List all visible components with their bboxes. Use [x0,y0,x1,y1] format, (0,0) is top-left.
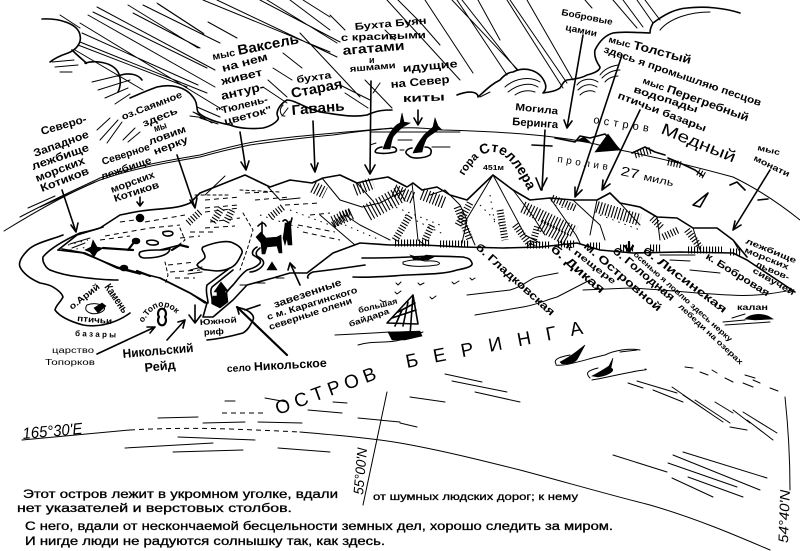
labels: south-coast bays and capes [473,240,772,367]
label: Staraya Gavan bay: Гавань [291,97,345,118]
bottom text block: С него, вдали от нескончаемой бесцельности земных дел, хорошо следить за миром. [25,521,613,533]
label: sea lion rookery: лежбище [744,237,798,265]
label: Cape Tolsty: мыс Толстый [607,31,693,67]
labels: south-coast bays and capes: к. Бобровая [703,250,772,299]
island outline and mountains [58,175,795,317]
bottom text block: Этот остров лежит в укромном уголке, вдали [23,489,338,501]
label: kingdom of puffins: Топорков [45,357,96,367]
label: strait 27 miles: 27 миль [619,163,675,189]
label: Cape Peregrebny: водопады [632,84,699,116]
label: Nikolsky roadstead: Никольский [122,341,194,361]
label: big baidara: байдара [348,306,391,329]
label: whales going north: киты [403,92,445,105]
label: Medny island [593,114,738,166]
label: Nikolsky roadstead [122,341,194,375]
label: Mount Steller: 451м [483,165,504,172]
label: sea lion rookery: морских [743,246,791,272]
kalan (sea otter) [723,314,773,325]
west bays and islets [19,227,260,340]
clouds [42,7,740,143]
grid lines and coordinates: 165°30'E [22,421,83,443]
label: lake Saranное and northern rookery: мы [153,120,168,135]
labels: south-coast bays and capes: б. Гладковская [473,241,557,318]
label: whales going north: на Север [390,74,450,91]
label: sea lion rookery: сивучей [751,266,796,297]
label: reindeer brought from Karaginsky: завезенные [272,277,344,311]
label: beaver traps: Бобровые [561,7,614,27]
speech-shaped cloud [130,86,392,129]
label: Cape Vaksel: цветок" [223,105,273,128]
label: Buyan bay: яшмами [349,60,396,74]
label: Buyan bay: с красивыми [341,30,426,44]
bottom text block [17,489,613,548]
label: Cape Peregrebny: мыс Перегребный [641,75,750,124]
bottom text block: И нигде люди не радуются солнышку так, как здесь. [25,536,385,548]
label: Cape Monati [752,143,792,179]
grid lines and coordinates: 55°00'N [350,446,370,495]
boat: big baidara [387,295,422,340]
label: kingdom of puffins: царство [52,346,95,355]
reindeer [256,218,292,254]
whales at sea [555,345,646,380]
sea heading: Bering Island: ОСТРОВ [273,364,379,420]
label: Bering's grave: Могила [515,102,559,118]
label: Bering's grave: Беринга [512,116,559,131]
grid lines and coordinates: 54°40'N [775,489,793,543]
labels: south-coast bays and capes: к пещере [564,241,618,286]
label: Buyan bay [341,16,427,74]
label: Ariy Kamen islet [67,282,130,339]
label: Ariy Kamen islet: птичьи [77,313,113,326]
label: sea lion rookery: львов- [754,260,791,282]
label: reindeer brought from Karaginsky: с м. Карагинского [266,285,359,322]
label: reindeer brought from Karaginsky: северные олени [268,296,353,332]
waves and birds [125,255,793,497]
label: Staraya Gavan bay: Старая [290,75,344,101]
label: kingdom of puffins [45,346,96,367]
label: Ariy Kamen islet: базары [75,329,117,339]
label: strait 27 miles: пролив [557,154,609,173]
label: lake Saranное and northern rookery: лежбище [99,154,154,183]
island interior: lakes, rivers, landmarks [62,190,284,308]
label: Cape Monati: мыс [757,143,782,157]
label: Cape Peregrebny [616,75,750,134]
Medny island mountains [555,134,768,207]
label: Ariy Kamen islet: о.Арий [67,282,102,312]
inlet and islet south of the mountains [308,255,472,278]
label: Staraya Gavan bay: бухта [296,69,333,86]
label: Medny island: Медный [659,121,738,166]
label: Cape Vaksel: мыс Ваксель [211,30,300,63]
labels: south-coast bays and capes: б. Дикая [548,242,608,296]
label: Staraya Gavan bay [290,69,345,118]
bottom text block: от шумных людских дорог; к нему [373,491,579,503]
label: North-west rookery: Северо- [40,113,88,138]
label: Cape Vaksel: на нем [221,51,269,75]
label: whales going north [390,58,458,105]
label: Nikolskoye village: село Никольское [226,356,327,375]
label: Cape Monati: монати [752,153,792,179]
label: whales going north: идущие [402,58,458,75]
sea heading: Bering Island [273,318,585,420]
label: lake Saranное and northern rookery: Котиков [113,180,161,205]
label: Bering's grave [512,102,559,146]
grid lines and coordinates [22,392,793,550]
label: Toporok islet: о.Топорок [140,302,180,322]
horizon line [4,128,800,231]
labels: south-coast bays and capes: осенью я ловлю здесь нерку [632,250,735,344]
labels: south-coast bays and capes: м. Островной [581,240,664,314]
right clouds [457,7,740,97]
arrows [62,35,770,355]
label: Cape Vaksel: живет [219,67,264,88]
label: Cape Tolsty: здесь я промышляю песцов [602,44,763,109]
labels: south-coast bays and capes: лебеди на озерах [677,302,746,367]
labels: south-coast bays and capes: калан [737,303,768,312]
label: Cape Vaksel: "Тюлень- [215,94,269,118]
label: North-west rookery [30,113,91,195]
label: big baidara: большая [357,296,399,315]
label: south reef [200,315,237,337]
label: lake Saranное and northern rookery: морских [109,170,157,196]
label: Cape Vaksel: антур- [220,79,266,103]
sun rays [60,0,660,122]
label: south reef: Южной [200,315,237,327]
left cloud [42,19,80,62]
label: Mount Steller: гора Стеллера [460,144,534,191]
label: Buyan bay: агатами [342,38,405,58]
label: Medny island: остров [593,114,650,135]
label: sea lion rookery [743,237,798,297]
labels: south-coast bays and capes: б. Голодная [610,245,677,304]
label: lake Saranное and northern rookery: ловим [147,124,188,148]
label: lake Saranное and northern rookery [99,90,190,205]
label: North-west rookery: морских [34,155,88,185]
label: strait 27 miles [557,154,675,189]
label: big baidara [348,296,399,329]
dashed wave [222,412,263,414]
labels: south-coast bays and capes: б. Лисинская [640,245,729,316]
label: North-west rookery: лежбище [30,142,91,173]
label: lake Saranное and northern rookery: здесь [141,106,179,130]
label: Buyan bay: и [369,55,375,65]
label: Nikolsky roadstead: Рейд [144,358,176,375]
label: Cape Peregrebny: птичьи базары [616,90,708,134]
label: beaver traps: цамии [565,22,598,39]
label: lake Saranное and northern rookery: Северное [101,142,152,168]
label: Cape Vaksel [211,30,300,128]
label: Toporok islet [140,302,180,322]
bottom text block: нет указателей и верстовых столбов. [17,503,292,515]
label: Buyan bay: Бухта Буян [354,16,427,33]
label: beaver traps [561,7,614,39]
sea heading: Bering Island: БЕРИНГА [404,318,585,373]
label: lake Saranное and northern rookery: нерку [152,134,190,158]
label: south reef: риф [204,326,225,337]
label: reindeer brought from Karaginsky [266,277,359,332]
label: lake Saranное and northern rookery: оз.Саямное [120,90,184,123]
label: Cape Tolsty [602,31,763,109]
whales near the bay Buyan [370,113,450,158]
label: North-west rookery: Западное [32,129,91,160]
label: Ariy Kamen islet: Камень [102,282,130,316]
label: North-west rookery: Котиков [39,165,91,195]
